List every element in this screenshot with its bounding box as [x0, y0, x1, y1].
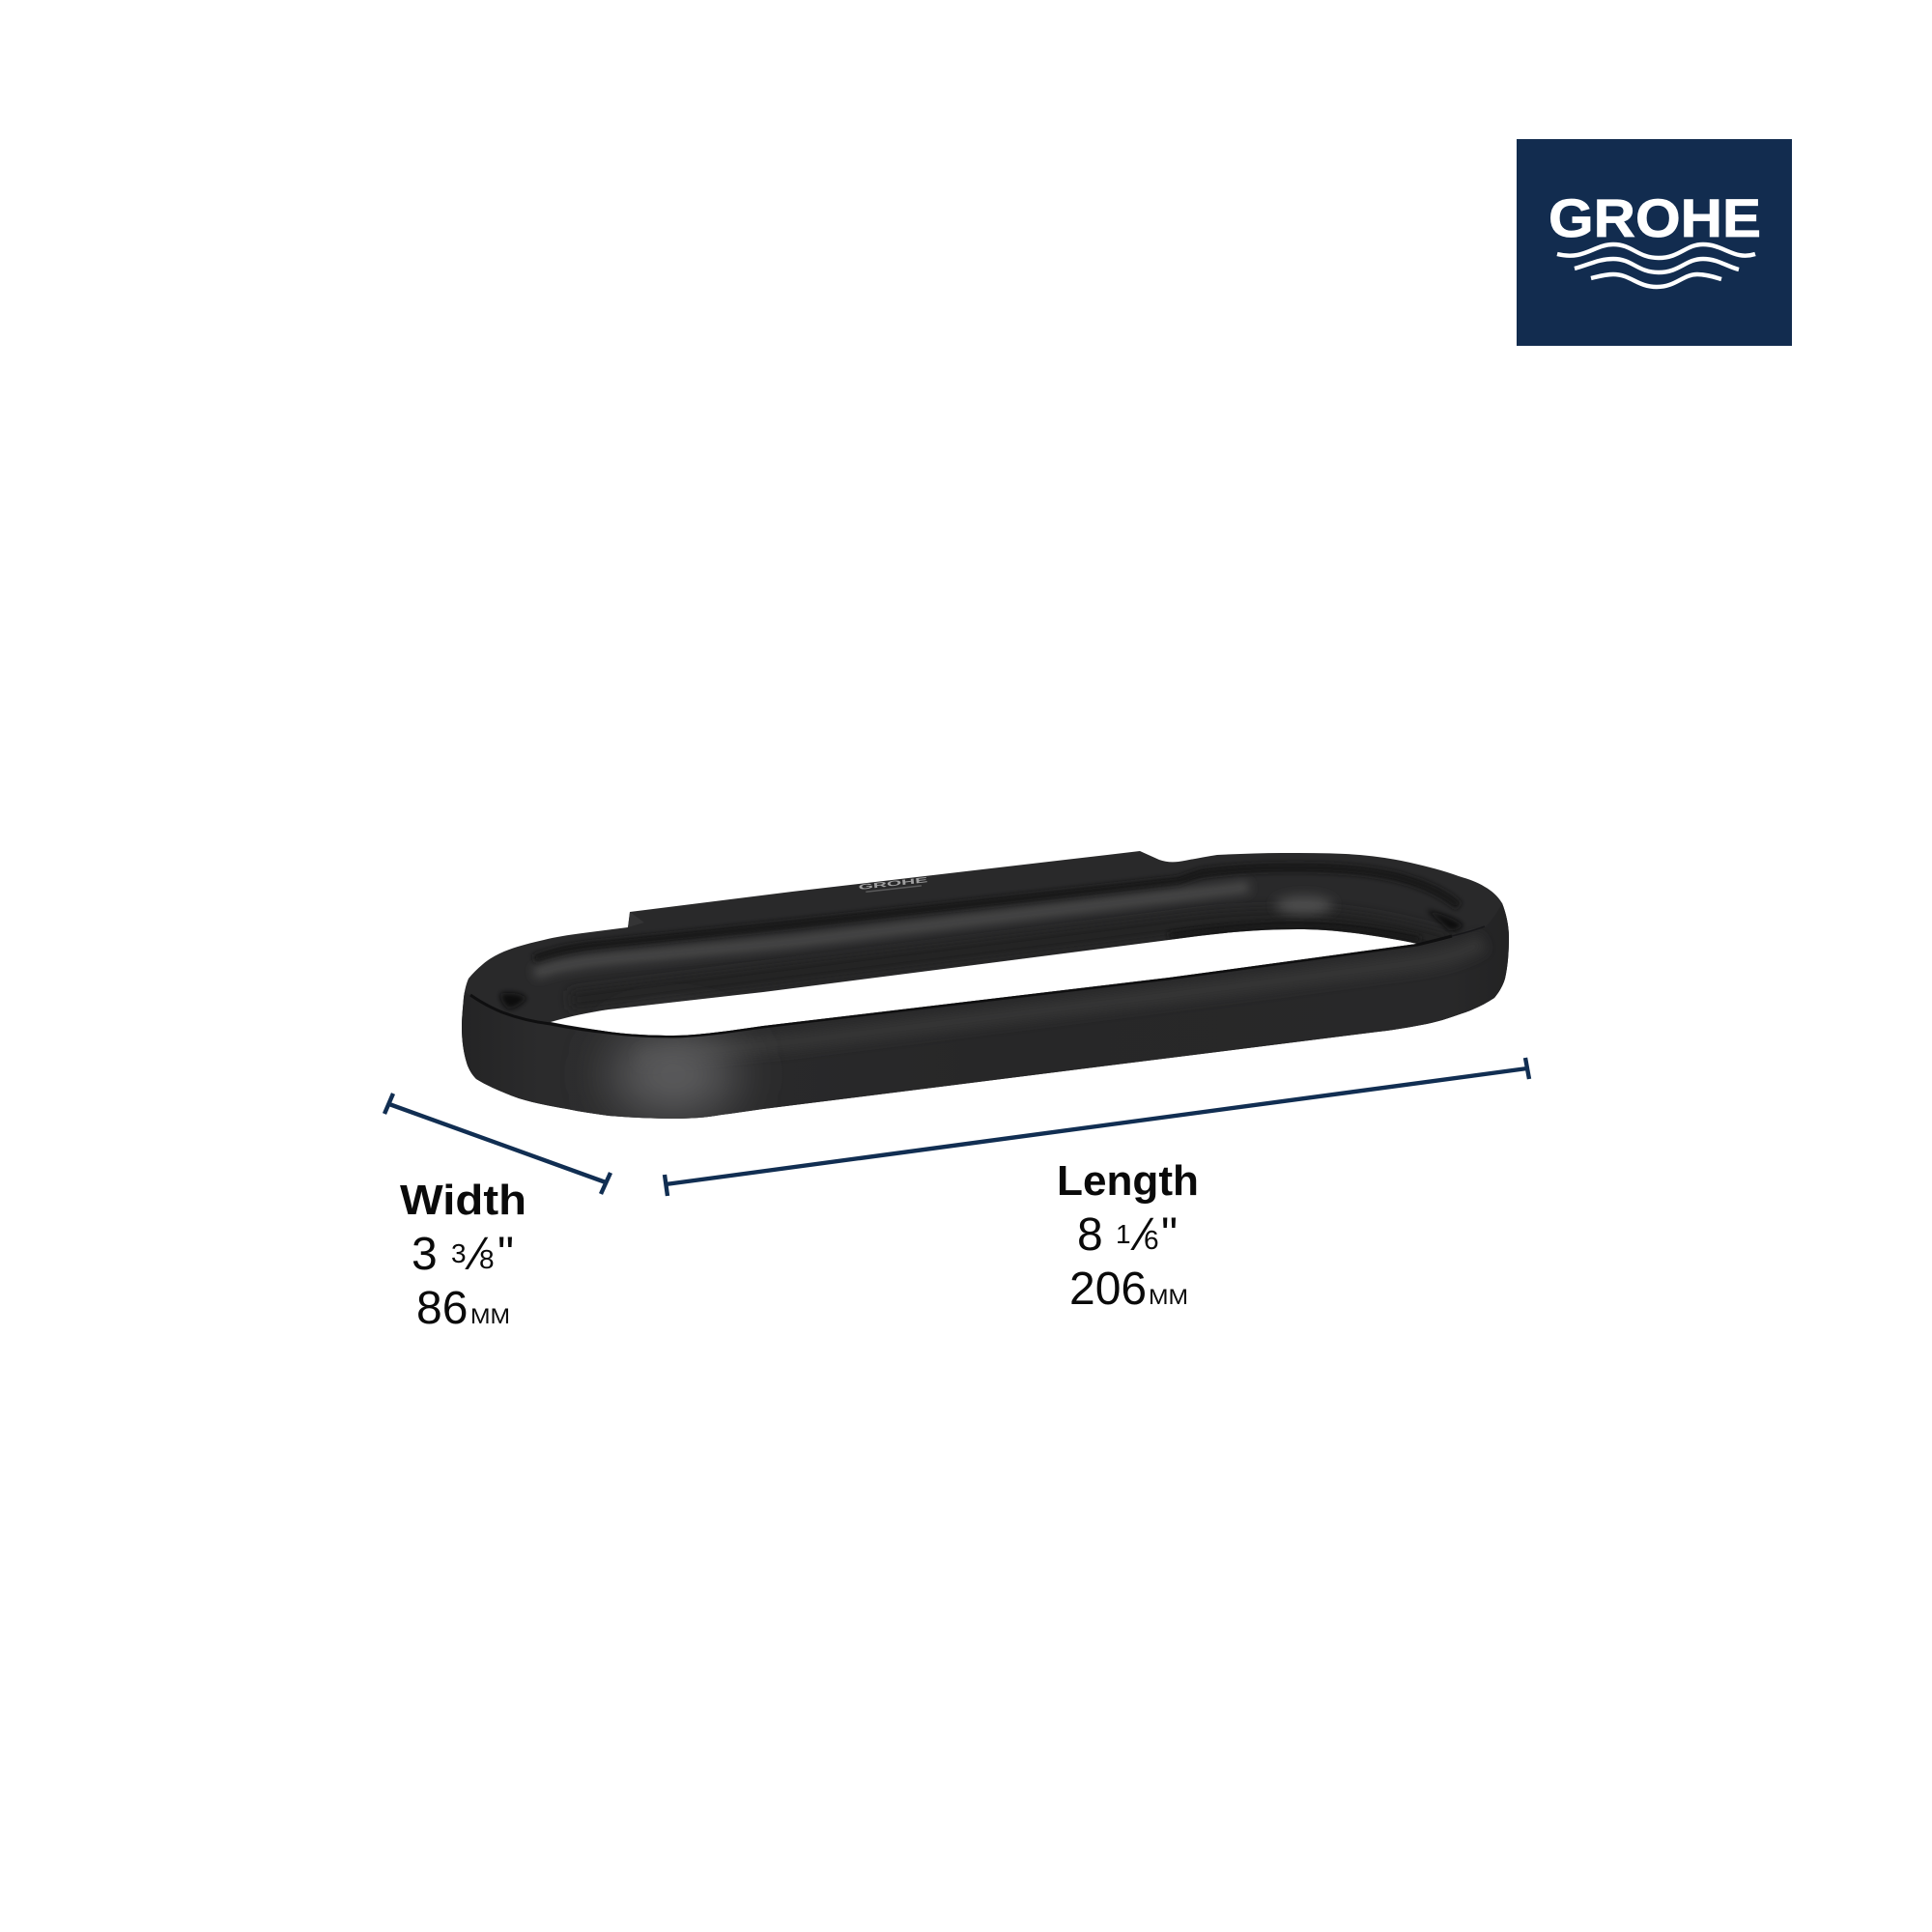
dimension: length — [665, 1058, 1529, 1196]
GROHE logo badge — [1517, 139, 1792, 346]
logo waves — [1557, 244, 1755, 287]
label: width — [400, 1177, 526, 1334]
engraved logo on bracket — [858, 875, 928, 893]
engraved logo on bracket: GROHE — [858, 875, 928, 892]
label: width: 8 — [479, 1244, 495, 1274]
inner wall lower shade — [570, 918, 1449, 1001]
front lip dark line — [470, 936, 1452, 1037]
front face highlight — [610, 1032, 737, 1117]
label: width: 86 — [416, 1283, 468, 1334]
right lip fade — [1452, 926, 1485, 936]
label: length: 206 — [1069, 1264, 1147, 1315]
inner corner glow — [1275, 896, 1333, 914]
left inner recess — [500, 993, 526, 1009]
label: length: MM — [1149, 1285, 1188, 1309]
label: length: ⁄ — [1130, 1209, 1154, 1261]
label: length: 6 — [1144, 1225, 1159, 1255]
dark edge above hole, right — [1169, 925, 1420, 940]
logo wordmark: GROHE — [1548, 187, 1761, 248]
label: width: ⁄ — [465, 1229, 489, 1280]
label: length: " — [1161, 1209, 1178, 1261]
label: width: MM — [470, 1304, 510, 1328]
inner back wall shading — [534, 867, 1459, 959]
label: width: Width — [400, 1177, 526, 1224]
label: length: Length — [1057, 1157, 1199, 1205]
front top edge shine — [734, 938, 1483, 1053]
inner back wall highlight — [534, 887, 1249, 974]
label: width: 3 — [412, 1229, 438, 1280]
label: width: " — [497, 1229, 514, 1280]
product: black towel ring — [454, 851, 1526, 1140]
dimension: width — [384, 1094, 611, 1194]
infographic canvas — [383, 139, 1792, 1323]
label: length: 8 — [1077, 1209, 1103, 1261]
front face — [462, 903, 1509, 1119]
label: length — [1057, 1157, 1199, 1315]
label: length: 1 — [1116, 1219, 1131, 1249]
right inner recess — [1426, 910, 1463, 930]
label: width: 3 — [451, 1238, 467, 1268]
bracket corner facet — [628, 912, 644, 927]
